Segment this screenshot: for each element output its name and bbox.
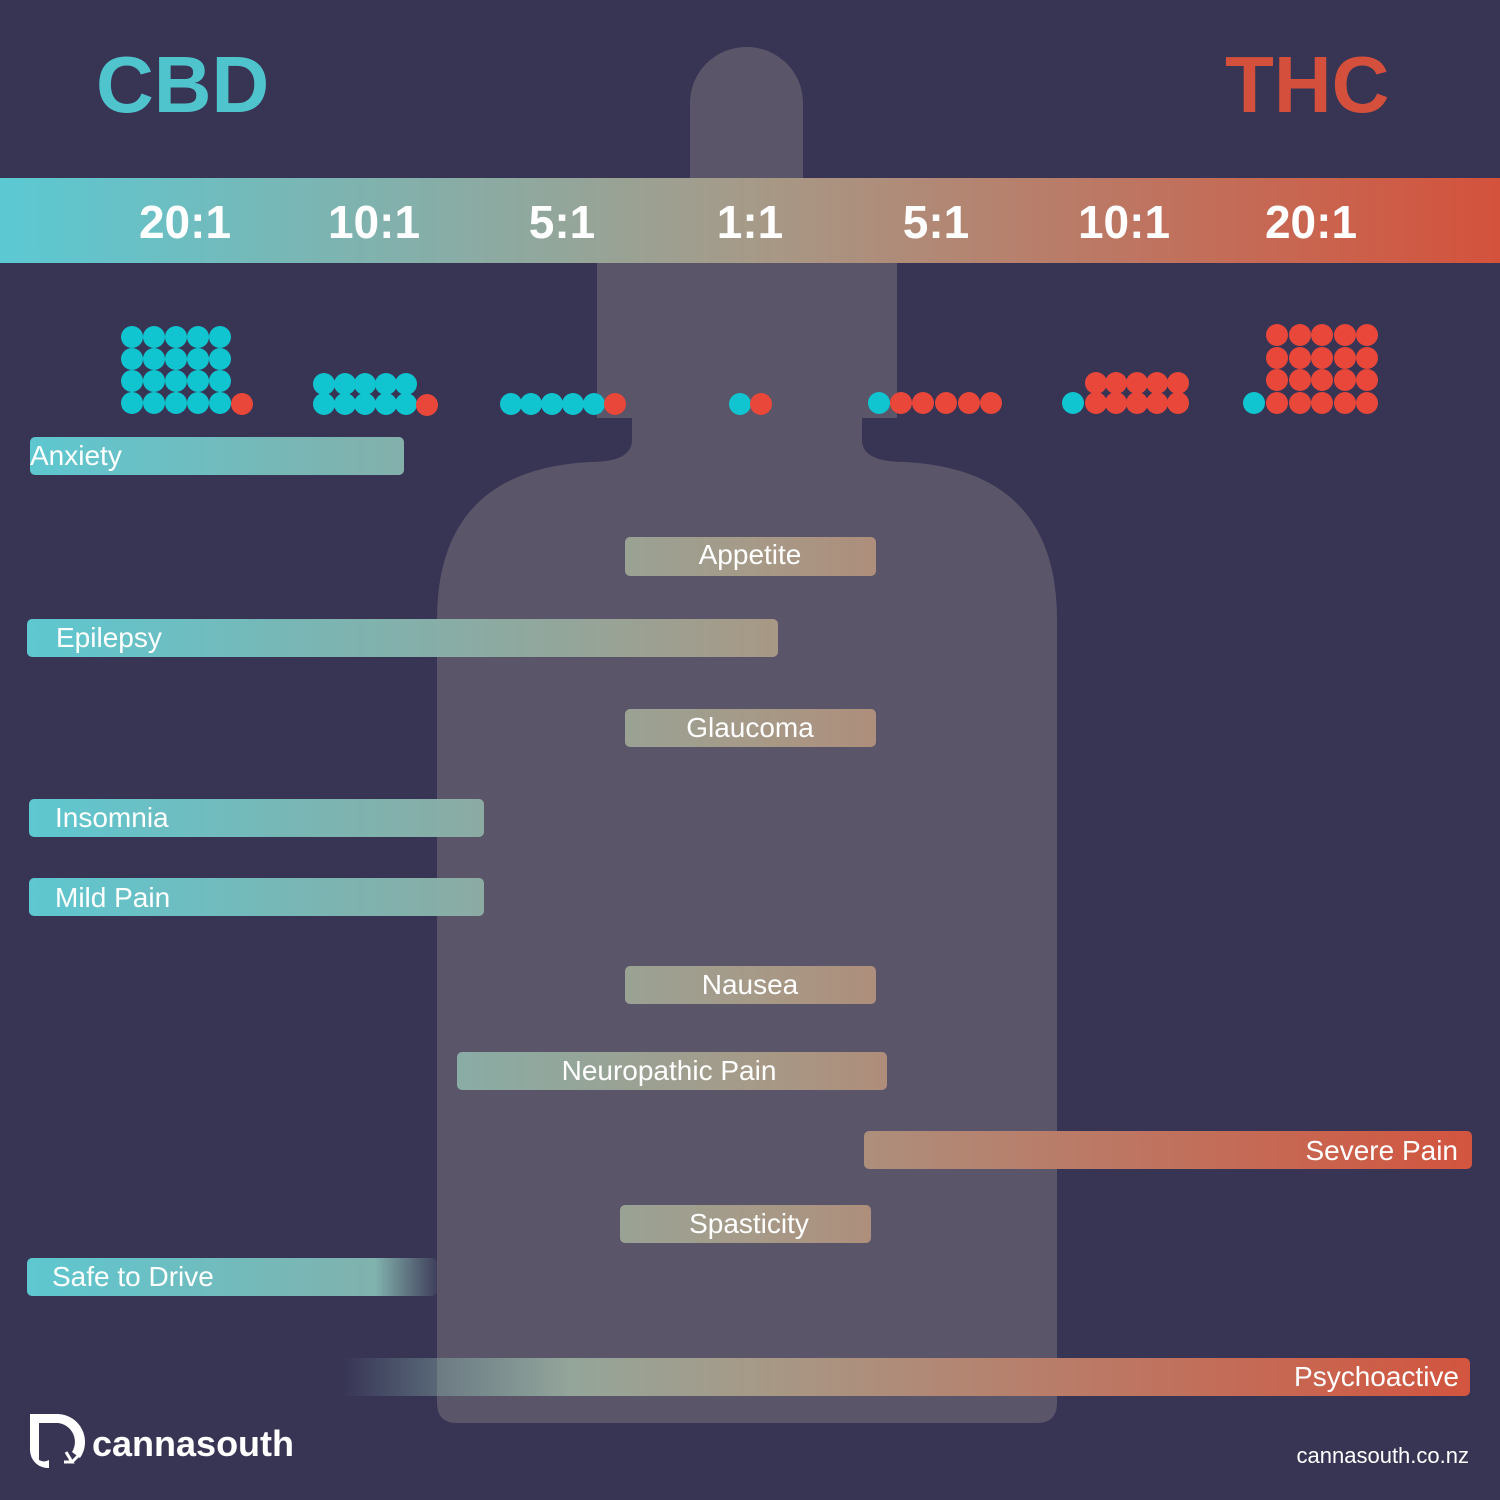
bar: Mild Pain: Mild Pain: [55, 882, 170, 913]
bar: Insomnia: Insomnia: [55, 802, 169, 833]
bar: Mild Pain: [29, 878, 484, 916]
bar: Safe to Drive: [27, 1258, 437, 1296]
ratio scale bar: 5:1: [903, 196, 969, 248]
logo: cannasouth: [30, 1414, 294, 1468]
bar: Severe Pain: [864, 1131, 1472, 1169]
ratio scale bar: 1:1: [717, 196, 783, 248]
20:1 cbd: [121, 326, 231, 414]
bar: Neuropathic Pain: Neuropathic Pain: [562, 1055, 776, 1086]
bar: Glaucoma: Glaucoma: [686, 712, 814, 743]
ratio scale bar: 5:1: [529, 196, 595, 248]
condition bars: [27, 437, 1472, 1396]
bar: Anxiety: Anxiety: [30, 440, 122, 471]
ratio scale bar: [0, 178, 1500, 263]
ratio scale bar: 20:1: [139, 196, 231, 248]
ratio scale bar: 10:1: [328, 196, 420, 248]
bar: Spasticity: Spasticity: [689, 1208, 809, 1239]
bar: Psychoactive: [340, 1358, 1470, 1396]
bar: Nausea: Nausea: [702, 969, 799, 1000]
bar: Epilepsy: [27, 619, 778, 657]
logo: cannasouth: cannasouth: [92, 1423, 294, 1464]
bar: Spasticity: [620, 1205, 871, 1243]
ratio scale bar: 20:1: [1265, 196, 1357, 248]
bar: Neuropathic Pain: [457, 1052, 887, 1090]
bar: Epilepsy: Epilepsy: [56, 622, 162, 653]
bar: Severe Pain: Severe Pain: [1305, 1135, 1458, 1166]
bottle silhouette: [437, 47, 1057, 1423]
website url: cannasouth.co.nz: [1297, 1443, 1469, 1468]
bar: Psychoactive: Psychoactive: [1294, 1361, 1459, 1392]
bar: Appetite: Appetite: [699, 539, 801, 570]
bar: Anxiety: [30, 437, 404, 475]
title: CBD: CBD: [96, 40, 269, 129]
bar: Appetite: [625, 537, 876, 576]
bar: Safe to Drive: Safe to Drive: [52, 1261, 214, 1292]
ratio scale bar: 10:1: [1078, 196, 1170, 248]
bar: Glaucoma: [625, 709, 876, 747]
bar: Nausea: [625, 966, 876, 1004]
title: THC: THC: [1225, 40, 1389, 129]
dot ratio diagrams: [121, 324, 1378, 416]
bar: Insomnia: [29, 799, 484, 837]
